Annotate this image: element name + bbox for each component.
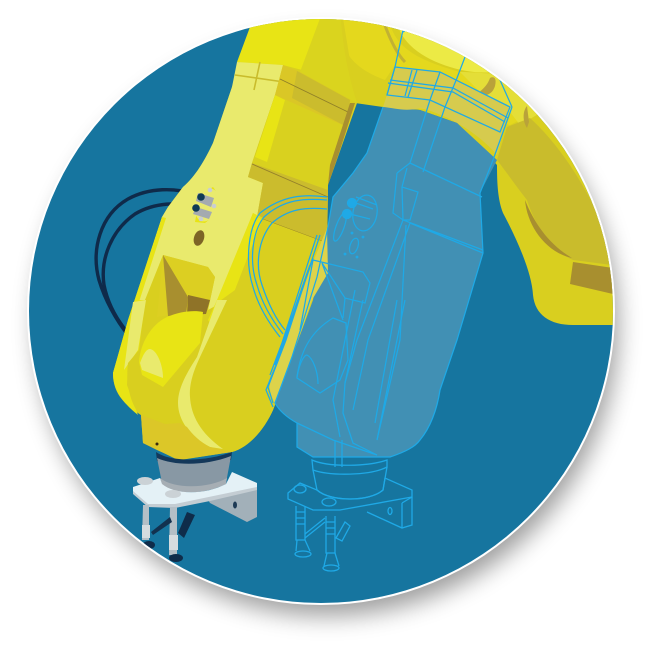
white ring bbox=[27, 17, 615, 605]
ghost overlap on yellow arm bbox=[383, 67, 510, 155]
wrist base bbox=[141, 415, 232, 460]
connectors bbox=[192, 188, 216, 221]
forearm silhouette bbox=[113, 0, 357, 460]
front lobe bbox=[214, 217, 322, 452]
wireframe ghost lines bbox=[249, 30, 512, 467]
left lobe bbox=[113, 300, 145, 415]
clipped artwork bbox=[96, 0, 640, 571]
drop shadow bbox=[36, 34, 618, 616]
badge background bbox=[29, 19, 613, 603]
mounting bracket bbox=[133, 472, 257, 522]
port hole bbox=[194, 230, 204, 246]
bright edge strips bbox=[113, 217, 166, 385]
upper link of the arm bbox=[336, 19, 613, 325]
cables bbox=[94, 188, 182, 333]
wrist opening bbox=[163, 255, 215, 316]
brown edge bbox=[328, 103, 355, 185]
wireframe ghost body bbox=[275, 107, 497, 457]
bolt plate patch bbox=[195, 187, 218, 223]
upper mustard bands bbox=[275, 65, 342, 124]
mid yellow box bbox=[252, 95, 275, 163]
ghost flange and bracket bbox=[288, 460, 412, 571]
lower mustard block bbox=[248, 163, 328, 243]
pale square seams bbox=[235, 62, 284, 90]
elbow dome bbox=[139, 311, 203, 387]
gripper flange bbox=[156, 452, 232, 492]
pale front face bbox=[140, 62, 283, 310]
top facets bbox=[237, 19, 320, 70]
suction cups bbox=[142, 505, 195, 562]
